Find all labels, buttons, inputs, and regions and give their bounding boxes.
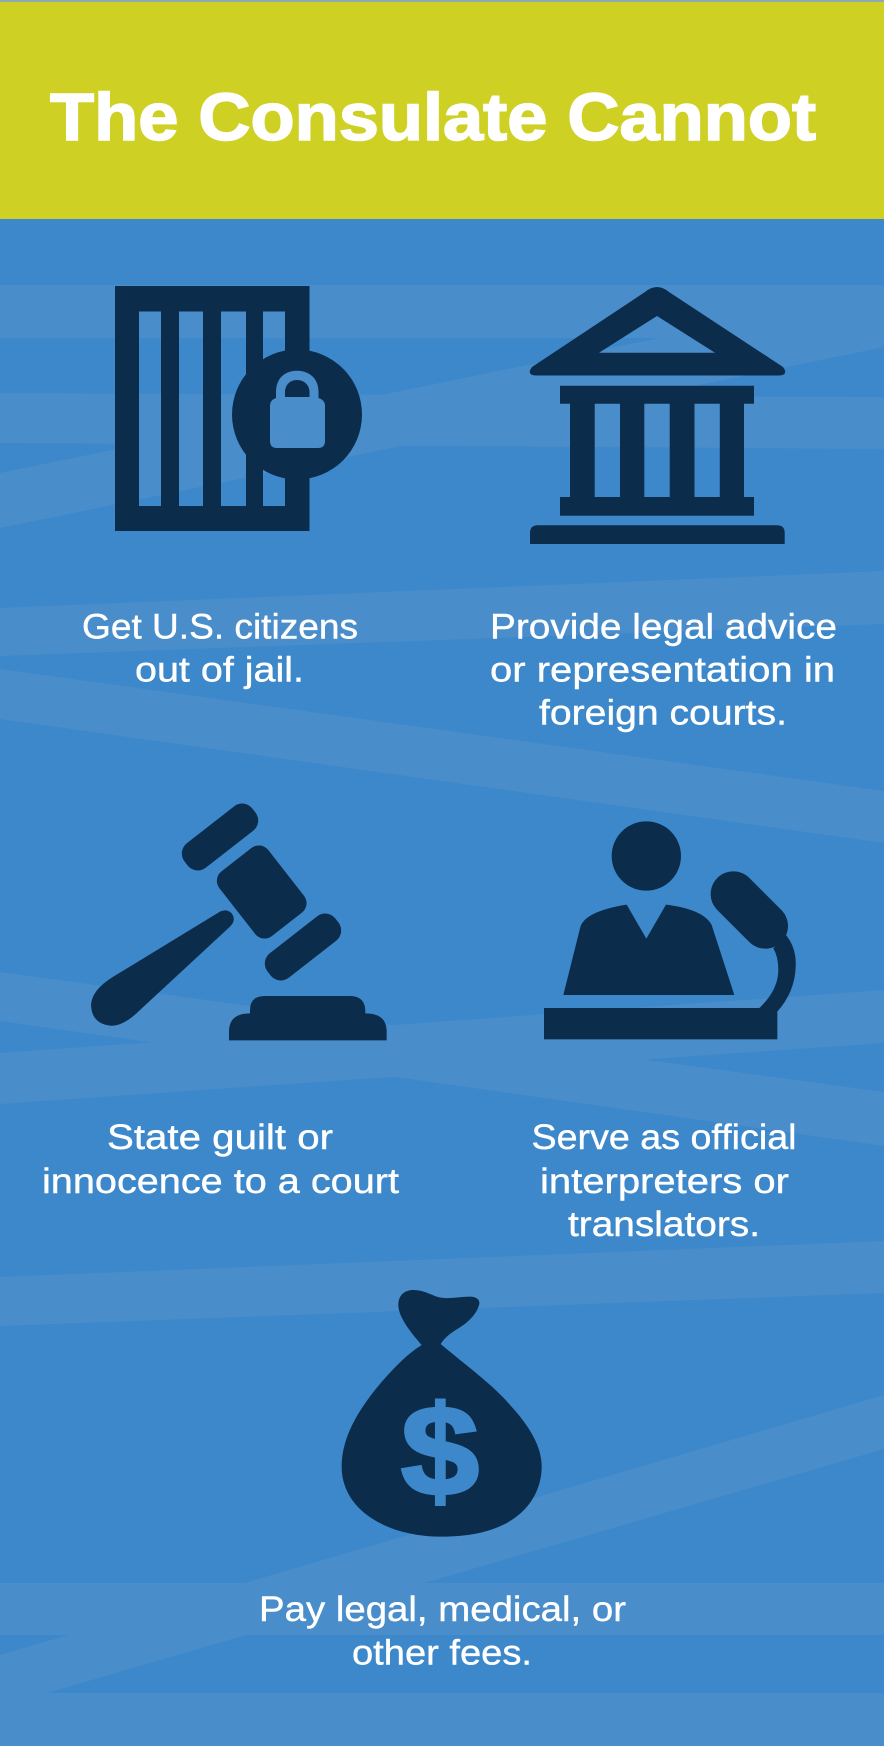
caption: legal advice: or representation in <box>490 650 835 690</box>
icon: gavel <box>91 798 387 1040</box>
panel: legal advice <box>490 287 837 732</box>
caption: legal advice: Provide legal advice <box>490 608 837 646</box>
caption: interpreters: interpreters or <box>540 1162 789 1201</box>
panel: jail <box>82 286 362 690</box>
caption: interpreters <box>532 1118 796 1244</box>
panel: fees <box>259 1290 626 1672</box>
icon: speaker at podium with microphone <box>544 821 796 1039</box>
caption: fees <box>259 1590 626 1672</box>
caption: jail: Get U.S. citizens <box>82 608 358 646</box>
icon: courthouse <box>530 287 785 544</box>
caption: jail: out of jail. <box>135 650 304 690</box>
caption: fees: Pay legal, medical, or <box>259 1590 626 1629</box>
caption: interpreters: translators. <box>568 1205 760 1244</box>
caption: fees: other fees. <box>352 1634 532 1672</box>
caption: legal advice: foreign courts. <box>539 694 787 732</box>
panel: interpreters <box>532 821 796 1244</box>
panel: guilt or innocence <box>42 798 399 1201</box>
caption: guilt or innocence <box>42 1118 399 1201</box>
caption: guilt or innocence: State guilt or <box>107 1118 333 1157</box>
icon: money bag <box>342 1290 542 1537</box>
header banner <box>0 0 884 219</box>
caption: jail <box>82 608 358 690</box>
caption: guilt or innocence: innocence to a court <box>42 1162 399 1201</box>
icon: jail bars with padlock <box>115 286 362 531</box>
caption: legal advice <box>490 608 837 732</box>
icon: money bag: $ <box>401 1379 479 1523</box>
caption: interpreters: Serve as official <box>532 1118 796 1157</box>
title: The Consulate Cannot <box>50 80 816 155</box>
